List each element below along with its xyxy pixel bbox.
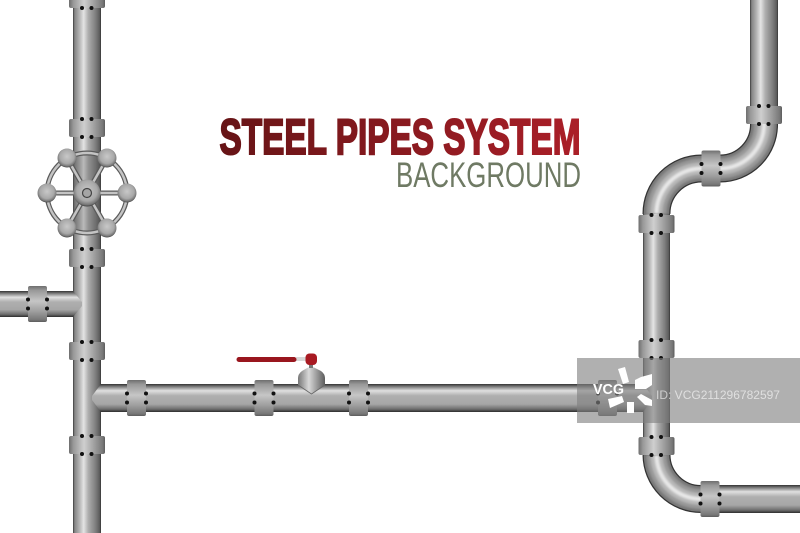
valve tip shading bbox=[298, 385, 325, 394]
curved elbows bbox=[656, 115, 764, 499]
flange: main pipe 3 bbox=[347, 380, 370, 416]
flange: upper elbow bbox=[700, 150, 722, 186]
flange: below wheel bbox=[69, 247, 105, 269]
top vertical pipe bbox=[750, 0, 778, 110]
handwheel valve bbox=[38, 148, 136, 238]
flange: left pipe top bbox=[69, 0, 105, 10]
bottom horizontal pipe bbox=[715, 485, 800, 513]
flange: top right vertical bbox=[746, 104, 782, 126]
valve body bbox=[298, 368, 325, 394]
watermark logo text: VCG bbox=[593, 382, 624, 398]
title: STEEL PIPES SYSTEM bbox=[220, 109, 580, 165]
flange: right pipe lower bbox=[638, 435, 674, 457]
valve stem bbox=[296, 357, 306, 361]
right pipe system bbox=[638, 0, 800, 517]
right vertical pipe bbox=[643, 210, 670, 460]
subtitle: BACKGROUND bbox=[396, 156, 581, 195]
flange: above main junction bbox=[69, 340, 105, 362]
red knob bbox=[306, 354, 317, 365]
watermark bbox=[577, 358, 800, 423]
wheel spokes bbox=[47, 158, 127, 228]
knob post bbox=[309, 365, 313, 368]
flange: above wheel bbox=[69, 117, 105, 139]
flange: main pipe 2 bbox=[252, 380, 276, 416]
wheel hub bbox=[74, 180, 100, 206]
flange: right pipe middle bbox=[638, 338, 674, 360]
flange: right pipe upper bbox=[638, 213, 674, 235]
watermark logo bbox=[608, 367, 652, 413]
wheel handles bbox=[38, 148, 136, 238]
main horizontal pipe bbox=[92, 380, 643, 416]
flange: main pipe 1 bbox=[125, 380, 148, 416]
left vertical pipe bbox=[69, 0, 105, 533]
main pipe junction end bbox=[590, 380, 652, 416]
red lever bbox=[236, 357, 296, 362]
flange: below main junction bbox=[69, 434, 105, 456]
flange: main pipe 4 bbox=[596, 380, 619, 416]
wheel ring bbox=[47, 153, 127, 233]
valve body shading bbox=[73, 153, 101, 233]
watermark id: ID: VCG211296782597 bbox=[656, 390, 780, 402]
left branch pipe bbox=[0, 286, 82, 322]
watermark band bbox=[577, 358, 800, 423]
lever valve bbox=[236, 354, 325, 394]
flange: left branch bbox=[26, 286, 49, 322]
flange: lower elbow bbox=[698, 481, 722, 517]
